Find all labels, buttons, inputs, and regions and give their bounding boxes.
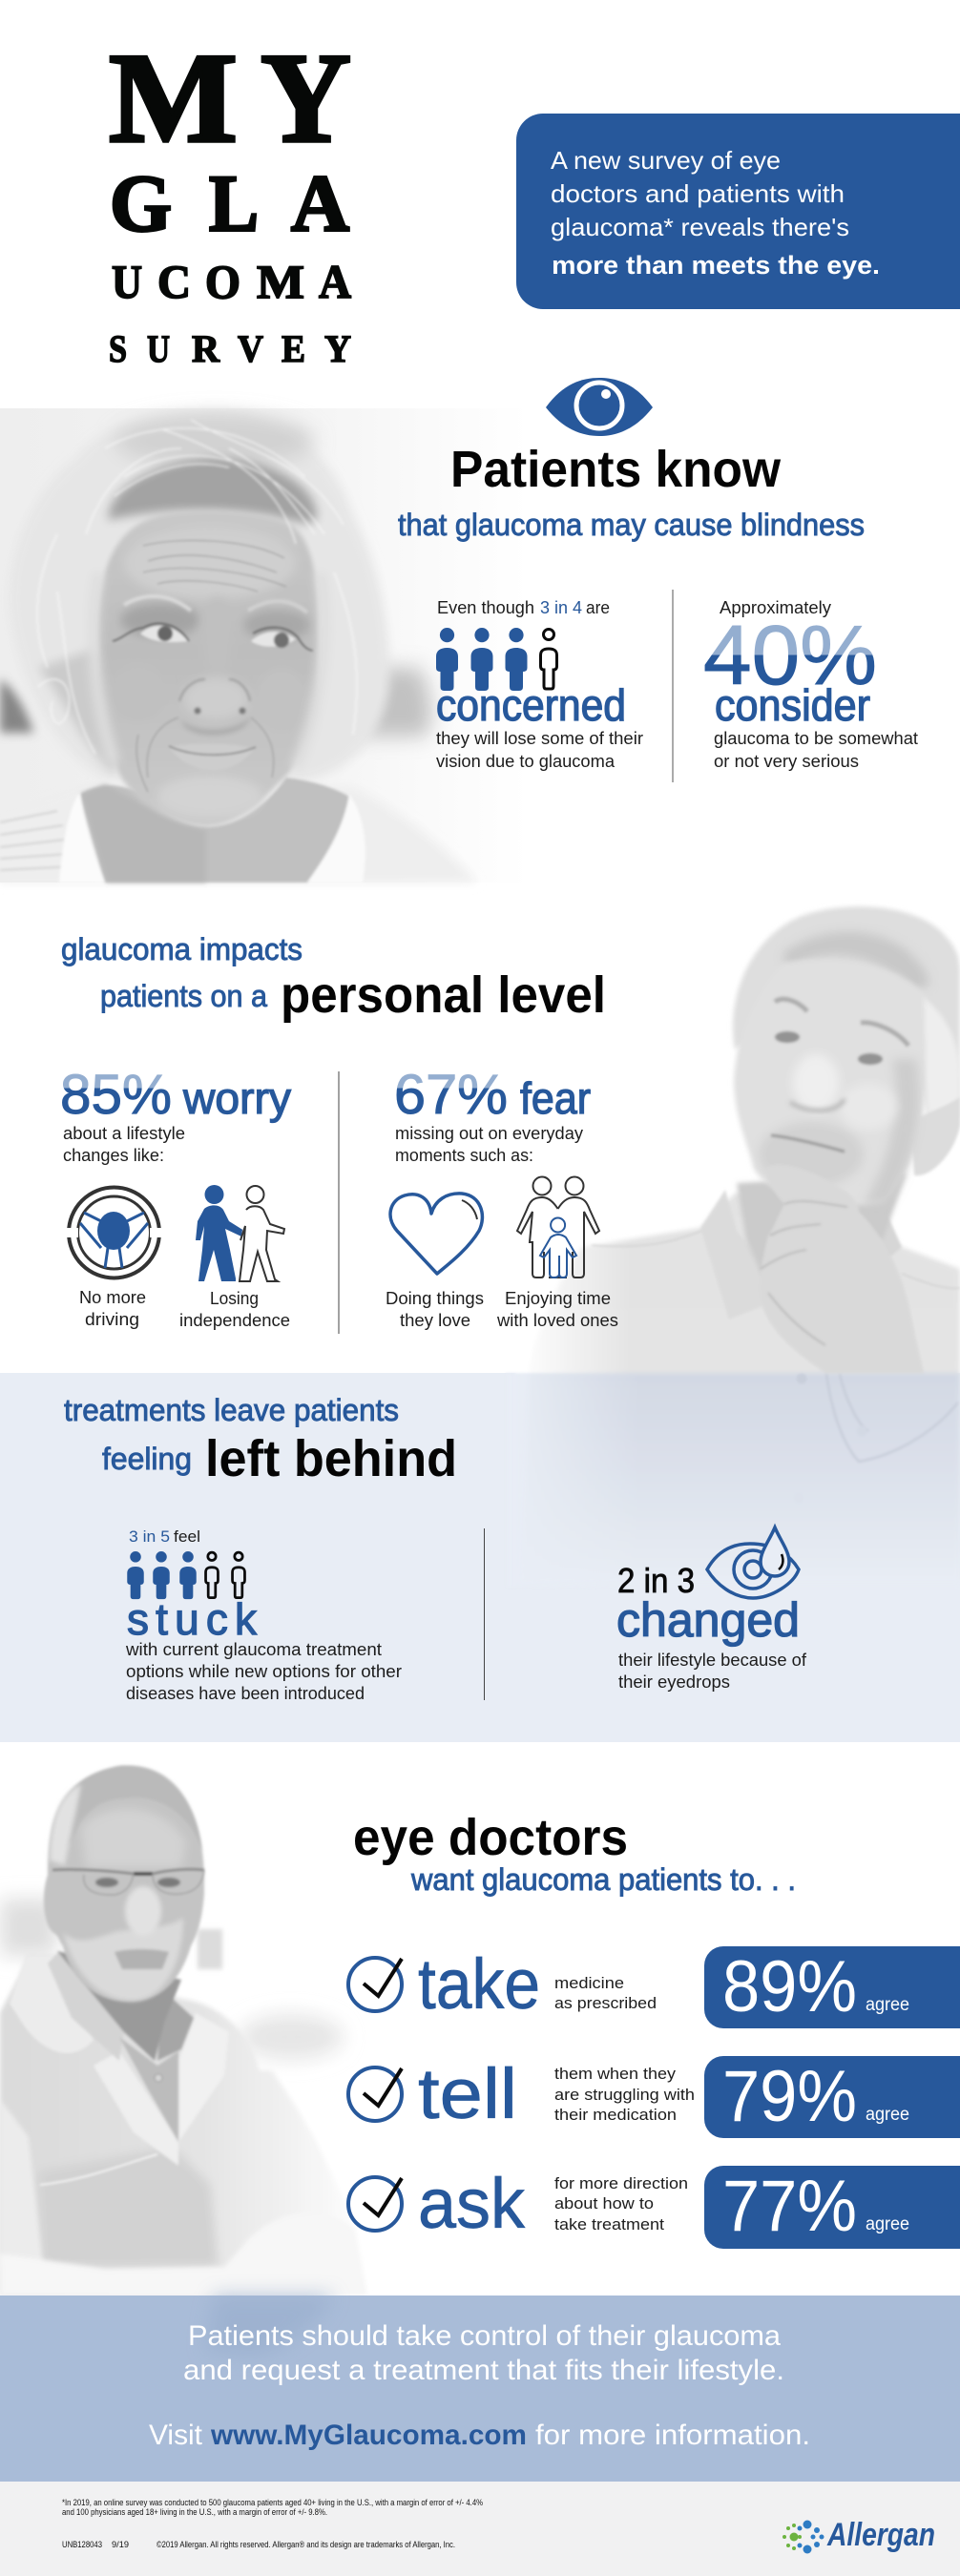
title: eye chart: E [282,327,305,370]
stat: 3 in 4 concerned: are [586,598,610,617]
row: ask: ask [418,2164,526,2243]
row: ask: 77% [722,2166,857,2247]
panel: patients know [0,378,960,883]
neck [737,1174,907,1278]
hair blending into face edges [94,572,324,768]
face [734,959,926,1206]
title: eye chart: S [109,327,127,370]
caption: losing independence [179,1289,290,1330]
heading: feeling [102,1442,192,1476]
heading: glaucoma impacts [61,932,303,966]
stat: 40% consider: Approximately [720,598,831,617]
stat: 3 in 4 concerned: Even though [437,598,534,617]
stat: 3 in 5 stuck: with current glaucoma treatment [125,1640,382,1659]
title: eye chart: O [205,255,240,308]
title: eye chart: C [157,255,191,308]
stat: 40% consider: glaucoma to be somewhat [714,729,918,748]
caption: doing things they love: Doing things [386,1289,484,1308]
stat: 3 in 5 stuck [125,1527,402,1703]
forearm and hands [0,2213,367,2296]
woman's neck [80,778,349,883]
heading: Patients know [450,441,782,498]
stat: 85% worry: about a lifestyle [63,1124,185,1143]
stat: 67% fear: 67% [394,1064,508,1126]
logo: Allergan [783,2517,935,2553]
shirt [48,1951,124,2061]
title: eye chart: M [109,28,238,170]
shirt collar [700,1190,783,1319]
heading: eye doctors [353,1809,628,1866]
title: eye chart: Y [261,28,351,170]
man's eyes and brows [775,999,908,1065]
stat: 3 in 4 concerned [436,598,643,771]
stat: 3 in 5 stuck: diseases have been introduced [126,1684,365,1703]
caption: no more driving: No more [79,1288,146,1307]
heading [61,932,606,1024]
neck [57,1951,181,2061]
footnote: 9/19 [112,2540,129,2549]
row: tell: their medication [554,2106,677,2124]
icon: heart [390,1194,482,1274]
row: ask [348,2164,960,2249]
stat: 3 in 4 concerned: vision due to glaucoma [436,752,616,771]
stat: 3 in 5 stuck: options while new options for other [126,1662,402,1681]
shirt [520,1193,960,1584]
title: eye chart: Y [324,327,351,370]
row: take [348,1944,960,2028]
title: eye chart [109,28,351,370]
caption: doing things they love [386,1289,484,1330]
photo: doctor with glasses [0,1765,367,2296]
intro callout box [516,114,960,309]
icon: family [517,1177,599,1278]
woman's face [97,511,319,826]
caption: enjoying time with loved ones: with loved ones [496,1311,618,1330]
title: eye chart: V [238,327,263,370]
pocket line [40,2154,157,2185]
heading: treatments leave patients [64,1393,399,1427]
footnote: *In 2019, an online survey was conducted to 500 glaucoma patients aged 40+ living in the U.S., with a margin of error of +/- 4.4% [62,2498,483,2507]
photo: older man with hand on chin [506,906,960,1588]
stat: 40% consider: or not very serious [714,752,859,771]
panel: call to action: www.MyGlaucoma.com [210,2420,527,2451]
row: take: as prescribed [554,1994,657,2012]
stat: 2 in 3 changed [616,1527,807,1692]
icon: check [348,2067,402,2121]
row: take: medicine [554,1974,624,1992]
row: take: 89% [722,1946,857,2027]
caption: enjoying time with loved ones: Enjoying time [505,1289,611,1308]
stat: 3 in 4 concerned: 3 in 4 [540,598,582,617]
stat: 67% fear: missing out on everyday [395,1124,583,1143]
panel: personal level [60,932,618,1334]
logo: Allergan: Allergan [826,2517,935,2553]
icon: check [348,2177,402,2231]
stat: 3 in 4 concerned: they will lose some of their [436,729,643,748]
stat: 3 in 5 stuck: stuck [127,1594,258,1644]
footnote: and 100 physicians aged 18+ living in the U.S., with a margin of error of +/- 9.8%. [62,2507,327,2517]
head [44,1765,204,2002]
row: tell: agree [866,2105,909,2125]
stat: 67% fear: moments such as: [395,1146,533,1165]
heading: patients on a [100,979,267,1013]
title: eye chart: U [112,255,142,308]
intro callout box: A new survey of eye [551,146,781,175]
row: ask: agree [866,2214,909,2234]
title: eye chart: A [319,255,351,308]
subheading: that glaucoma may cause blindness [398,508,865,542]
stat: 67% fear [394,1064,591,1165]
caption: losing independence: independence [179,1311,290,1330]
footnote: UNB128043 [62,2540,102,2549]
stat: 2 in 3 changed: their lifestyle because of [618,1651,807,1670]
intro callout box: glaucoma* reveals there's [551,213,849,241]
ear [911,1097,960,1175]
caption: no more driving [79,1288,146,1329]
row: ask: about how to [554,2194,654,2212]
stat: 40% consider: consider [715,680,870,730]
panel: eye doctors want [348,1809,960,2249]
title: eye chart: L [209,158,259,248]
woman's eyes, brows and mouth [113,596,313,770]
footnote [62,2498,483,2549]
panel: call to action: and request a treatment that fits their lifestyle. [183,2355,784,2386]
caption: enjoying time with loved ones [496,1289,618,1330]
stat: 3 in 4 concerned: concerned [436,680,626,730]
heading [64,1393,457,1487]
icon: check [348,1958,402,2011]
row: tell: tell [418,2054,517,2133]
row: take: agree [866,1995,909,2015]
stat: 67% fear: fear [520,1073,591,1123]
hair [733,906,960,1135]
icon: person guiding person [196,1185,284,1281]
icon: eye [546,378,653,436]
footnote: ©2019 Allergan. All rights reserved. Allergan® and its design are trademarks of Allergan, Inc. [157,2540,455,2549]
icon: five people, three filled [127,1551,244,1599]
panel: footer [0,2482,960,2576]
panel: left behind [64,1393,807,1703]
stat: 40% consider: 40% [703,608,877,702]
stat: 85% worry: changes like: [63,1146,164,1165]
stat: 85% worry: worry [182,1073,291,1123]
intro callout box: doctors and patients with [551,179,845,208]
title: eye chart: U [147,327,170,370]
intro callout box: more than meets the eye. [552,251,880,280]
title: eye chart: G [110,158,172,248]
title: eye chart: M [257,255,304,308]
stat: 85% worry: 85% [60,1064,172,1126]
stat: 2 in 3 changed: their eyedrops [618,1672,730,1692]
stat: 2 in 3 changed: changed [616,1593,800,1647]
row: tell [348,2054,960,2138]
icon: steering wheel [67,1187,161,1278]
panel: treatments background band [0,1373,960,1742]
coat collar and lapels [10,1956,94,2053]
panel: call to action: Visit [149,2420,203,2451]
caption: doing things they love: they love [400,1311,470,1330]
glasses [52,1869,204,1895]
subheading: want glaucoma patients to. . . [410,1862,796,1897]
row: tell: 79% [722,2056,857,2137]
title: eye chart: A [291,158,349,248]
caption: no more driving: driving [85,1310,139,1329]
caption: losing independence: Losing [210,1289,259,1308]
stat: 40% consider [703,598,918,771]
heading: left behind [205,1430,457,1487]
panel: call to action: Patients should take control of their glaucoma [188,2320,781,2352]
icon: four people, three filled [436,628,557,691]
stat: 85% worry [60,1064,291,1165]
photo: older woman [0,412,477,883]
row: tell: are struggling with [554,2086,695,2104]
stat: 3 in 5 stuck: feel [174,1527,200,1546]
hand [759,1165,924,1373]
row: take: take [418,1944,540,2024]
heading: personal level [281,966,606,1024]
row: ask: take treatment [554,2215,664,2233]
panel: call to action [0,2296,960,2482]
panel: call to action: for more information. [535,2420,810,2451]
band background [0,408,960,883]
row: ask: for more direction [554,2174,688,2192]
title: eye chart: R [192,327,220,370]
stat: 3 in 5 stuck: 3 in 5 [129,1527,170,1546]
icon: eye with drop [707,1527,799,1598]
coat [0,1956,367,2296]
row: tell: them when they [554,2065,677,2083]
stat: 2 in 3 changed: 2 in 3 [617,1561,695,1600]
